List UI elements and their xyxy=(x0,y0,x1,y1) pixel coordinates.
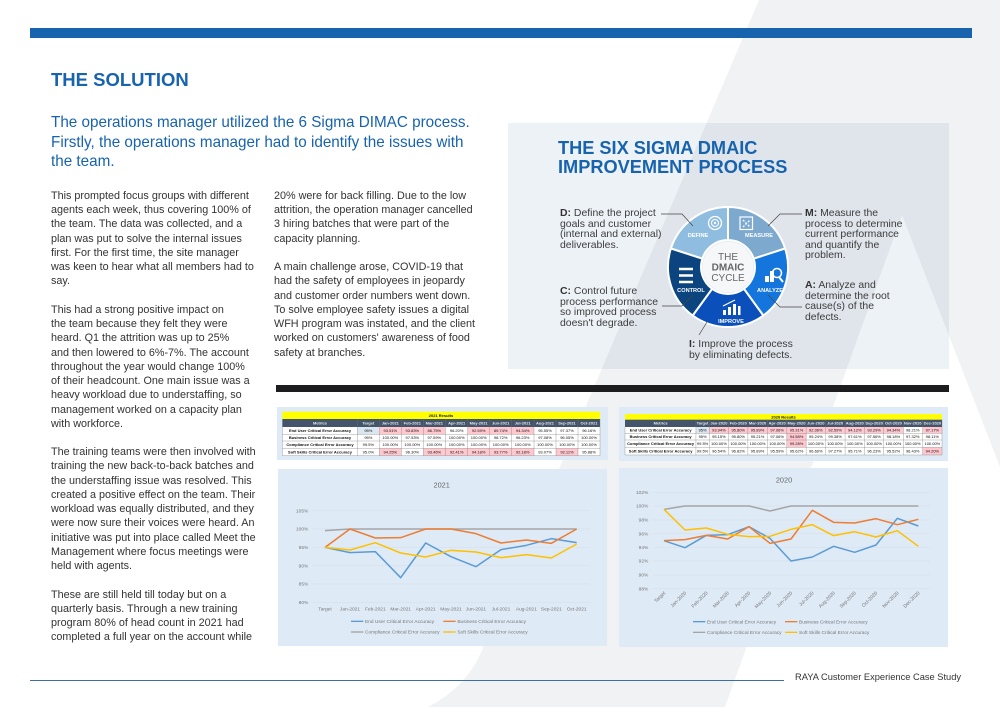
black divider bar xyxy=(276,385,949,392)
panel heading: THE SIX SIGMA DMAIC xyxy=(558,138,757,158)
line chart: 2021: Jul-2021 xyxy=(492,607,511,613)
callout: analyze: cause(s) of the xyxy=(805,301,874,312)
table: 2020 results: 100.00% xyxy=(808,441,824,446)
table: 2020 results: 100.00% xyxy=(730,441,747,446)
callout: control: doesn't degrade. xyxy=(560,318,637,329)
table: 2020 results: 100.00% xyxy=(847,441,863,446)
body text column 2: and customer order numbers went down. xyxy=(274,290,470,302)
table: 2020 results: 92.06% xyxy=(809,427,823,432)
body text column 2: 3 hiring batches that were part of the xyxy=(274,218,449,230)
callout: measure xyxy=(805,208,902,261)
table: 2020 results: 95.62% xyxy=(790,448,804,453)
table: 2021 results: Oct-2021 xyxy=(581,420,598,425)
table: 2021 results: Jan-2021 xyxy=(382,420,400,425)
table: 2020 results: Sep-2020 xyxy=(865,421,884,426)
callout: improve: I: Improve the process xyxy=(689,339,793,350)
center label: DMAIC xyxy=(712,262,744,274)
table: 2021 results: 93.83% xyxy=(406,428,420,433)
center label: CYCLE xyxy=(711,273,745,284)
line chart: 2020: 88% xyxy=(639,586,649,592)
line chart: 2021: Apr-2021 xyxy=(416,607,436,613)
body text column 2: attrition, the operation manager cancelled xyxy=(274,204,473,216)
line chart: 2020: May-2020 xyxy=(754,590,773,610)
line chart: 2021: Aug-2021 xyxy=(516,607,537,613)
table: 2020 results: 100.00% xyxy=(866,441,882,446)
line chart: 2020: 98% xyxy=(639,518,649,524)
table: 2020 results: Jul-2020 xyxy=(827,421,844,426)
table: 2020 results: Metrics xyxy=(654,421,668,426)
table: 2020 results: Feb-2020 xyxy=(730,421,748,426)
line chart: 2020: 102% xyxy=(636,490,649,496)
table: 2021 results: 89.74% xyxy=(494,428,508,433)
callout: improve xyxy=(689,339,793,361)
table: 2020 results: 95.59% xyxy=(770,448,784,453)
body text column 2: had the safety of employees in jeopardy xyxy=(274,275,465,287)
line chart: 2021: Jan-2021 xyxy=(340,607,360,613)
body text column 1: program 80% of head count in 2021 had xyxy=(51,617,244,629)
footer line xyxy=(30,680,784,681)
table: 2020 results: 95.89% xyxy=(751,427,765,432)
table: 2021 results: 100.00% xyxy=(471,442,487,447)
table: 2020 results: 97.27% xyxy=(828,448,842,453)
table: 2021 results: 93.51% xyxy=(384,428,398,433)
line chart: 2020 xyxy=(619,468,948,647)
callout: improve: by eliminating defects. xyxy=(689,350,792,361)
callout: measure: M: Measure the xyxy=(805,208,878,219)
body text column 1: These are still held till today but on a xyxy=(51,589,226,601)
table: 2020 results: 95% xyxy=(699,427,707,432)
table: 2020 results: 95.15% xyxy=(712,434,726,439)
line chart: 2020: 90% xyxy=(639,573,649,579)
table: 2020 results: 93.29% xyxy=(867,427,881,432)
callout: control: so improved process xyxy=(560,307,656,318)
table: 2020 results: 95.89% xyxy=(751,448,765,453)
body text column 1: initiative was put into place called Meet the xyxy=(51,532,256,544)
table: 2021 results: Jun-2021 xyxy=(492,420,510,425)
body text column 1: Management where focus meetings were xyxy=(51,546,248,558)
line chart: 2021: 90% xyxy=(299,563,309,569)
body text column 1: with workforce. xyxy=(51,418,123,430)
table: 2020 results: 94.34% xyxy=(887,427,901,432)
table: 2020 results: 95.31% xyxy=(790,427,804,432)
line chart: 2020: Mar-2020 xyxy=(712,590,731,609)
table: 2020 results: Jan-2020 xyxy=(710,421,728,426)
table: 2020 results: 98.18% xyxy=(887,434,901,439)
top bar xyxy=(30,28,972,38)
body text column 1: training the new back-to-back batches and xyxy=(51,460,254,472)
table: 2021 results: 97.08% xyxy=(538,435,552,440)
panel heading: IMPROVEMENT PROCESS xyxy=(558,157,787,177)
body text column 1: heard. Q1 the attrition was up to 25% xyxy=(51,332,229,344)
table: 2021 results: Feb-2021 xyxy=(404,420,422,425)
callout: analyze xyxy=(805,280,890,323)
line chart: 2020: Feb-2020 xyxy=(691,590,710,609)
table: 2020 results: Soft Skills Critical Error Accuracy xyxy=(629,448,693,453)
callout: control xyxy=(560,286,658,329)
table: 2021 results: Jul-2021 xyxy=(515,420,531,425)
line chart: 2021: Target xyxy=(318,607,332,613)
table: 2020 results: 93.94% xyxy=(712,427,726,432)
body text column 2: capacity planning. xyxy=(274,233,360,245)
body text column 1: plan was put to solve the internal issues xyxy=(51,233,242,245)
line chart: 2021: Jun-2021 xyxy=(466,607,486,613)
table: 2020 results: 99.5% xyxy=(697,448,709,453)
line chart: 2020: Nov-2020 xyxy=(881,590,901,610)
table: 2021 results: 2021 Results xyxy=(429,413,454,418)
body text column 1: were now sure their voices were heard. An xyxy=(51,517,254,529)
table: 2021 results: 99.5% xyxy=(363,442,374,447)
line chart: 2020: 92% xyxy=(639,559,649,565)
table: 2020 results: 97.61% xyxy=(848,434,862,439)
callout: analyze: defects. xyxy=(805,312,842,323)
table: 2020 results: 96.60% xyxy=(809,448,823,453)
callout: define: goals and customer xyxy=(560,219,651,230)
table: 2021 results: 100.00% xyxy=(449,442,465,447)
table: 2020 results: 94.12% xyxy=(848,427,862,432)
line chart: 2020: 100% xyxy=(636,504,649,510)
body text column 2: 20% were for back filling. Due to the low xyxy=(274,190,466,202)
table: 2020 results: Business Critical Error Accuracy xyxy=(630,434,692,439)
segment: define: DEFINE xyxy=(688,233,709,239)
center label: THE xyxy=(718,252,738,263)
table: 2021 results: 95% xyxy=(364,435,373,440)
table: 2021 results: 95.88% xyxy=(582,449,596,454)
table: 2020 results: 95.21% xyxy=(751,434,765,439)
callout: measure: current performance xyxy=(805,229,899,240)
table: 2020 results: Aug-2020 xyxy=(846,421,865,426)
table: 2020 results: Target xyxy=(697,421,709,426)
body text column 1: say. xyxy=(51,275,70,287)
table: 2021 results: 94.25% xyxy=(384,449,398,454)
callout: analyze: determine the root xyxy=(805,291,890,302)
line chart: 2021: Business Critical Error Accuracy xyxy=(457,619,527,625)
table: 2020 results: 97.32% xyxy=(906,434,920,439)
body text column 1: created a positive effect on the team. Their xyxy=(51,489,255,501)
callout: control: process performance xyxy=(560,297,658,308)
line chart: 2020: Compliance Critical Error Accuracy xyxy=(707,630,782,636)
body text column 1: The training teams were then involved with xyxy=(51,446,256,458)
table: 2021 results: 95.0% xyxy=(363,449,374,454)
table: 2021 results: 100.00% xyxy=(471,435,487,440)
body text column 1: of their headcount. One main issue was a xyxy=(51,375,250,387)
line chart: 2021: 2021 xyxy=(434,481,450,490)
body text column 1: completed a full year on the account while xyxy=(51,631,252,643)
table: 2020 results: May-2020 xyxy=(788,421,806,426)
intro text: the team. xyxy=(51,153,115,170)
callout: measure: problem. xyxy=(805,250,846,261)
table: 2021 results: 93.46% xyxy=(428,449,442,454)
leader lines xyxy=(661,214,802,336)
line chart: 2020: Soft Skills Critical Error Accuracy xyxy=(799,630,870,636)
line chart: 2020: Oct-2020 xyxy=(861,590,879,609)
body text column 1: and then lowered to 6%-7%. The account xyxy=(51,347,249,359)
line chart: 2021: 80% xyxy=(299,600,309,606)
table: 2021 results: 93.77% xyxy=(494,449,508,454)
body text column 1: workload was equally distributed, and they xyxy=(51,503,254,515)
body text column 1: quarterly basis. Through a new training xyxy=(51,603,237,615)
table: 2021 results: 94.18% xyxy=(472,449,486,454)
line chart: 2021: 95% xyxy=(299,545,309,551)
line chart: 2021: 105% xyxy=(296,508,309,514)
table: 2020 results: 96.82% xyxy=(731,448,745,453)
segment: improve: IMPROVE xyxy=(718,319,744,325)
body text column 1: first. For the first time, the site manager xyxy=(51,247,239,259)
table: 2020 results: Dec-2020 xyxy=(924,421,942,426)
table: 2020 results: Apr-2020 xyxy=(769,421,786,426)
table: 2021 results: 93.07% xyxy=(538,449,552,454)
table: 2021 results: Target xyxy=(362,420,375,425)
table: 2020 results: Oct-2020 xyxy=(885,421,903,426)
table: 2021 results: 100.00% xyxy=(581,435,597,440)
table: 2021 results: Soft Skills Critical Error Accuracy xyxy=(288,449,353,454)
line chart: 2020: End User Critical Error Accuracy xyxy=(707,619,777,625)
line chart: 2021: Compliance Critical Error Accuracy xyxy=(365,630,440,636)
table: 2020 results: 97.17% xyxy=(926,427,940,432)
body text column 2 xyxy=(274,190,475,359)
table: 2021 results: May-2021 xyxy=(470,420,488,425)
body text column 2: To solve employee safety issues a digital xyxy=(274,304,469,316)
body text column 1: the team. The data was collected, and a xyxy=(51,218,242,230)
intro text xyxy=(51,114,470,170)
callout: measure: process to determine xyxy=(805,219,902,230)
line chart: 2021: May-2021 xyxy=(440,607,462,613)
line chart: 2020: Jun-2020 xyxy=(776,590,794,609)
table: 2021 results: Apr-2021 xyxy=(448,420,466,425)
table: 2020 results: 95% xyxy=(699,434,707,439)
table: 2021 results: 97.59% xyxy=(428,435,442,440)
body text column 1 xyxy=(51,190,256,643)
table: 2021 results: 100.00% xyxy=(493,442,509,447)
body text column 1: This had a strong positive impact on xyxy=(51,304,224,316)
body text column 1: the team because they felt they were xyxy=(51,318,227,330)
line chart: 2021: Soft Skills Critical Error Accuracy xyxy=(457,630,528,636)
table: 2020 results: 95.52% xyxy=(887,448,901,453)
table: 2020 results: 96.43% xyxy=(906,448,920,453)
body text column 2: WFH program was instated, and the client xyxy=(274,318,475,330)
table: 2020 results: 95.24% xyxy=(809,434,823,439)
body text column 1: agents each week, thus covering 100% of xyxy=(51,204,251,216)
table: 2020 results: 100.00% xyxy=(905,441,921,446)
table: 2020 results: 97.56% xyxy=(867,434,881,439)
table: 2020 results: 100.00% xyxy=(924,441,941,446)
table: 2021 results: 100.00% xyxy=(382,442,399,447)
table: 2021 results: 92.18% xyxy=(516,449,530,454)
table: 2021 results: 100.00% xyxy=(581,442,597,447)
table: 2021 results: 98.72% xyxy=(494,435,508,440)
table: 2020 results: 100.00% xyxy=(886,441,902,446)
callout: define: deliverables. xyxy=(560,240,619,251)
table: 2020 results: 98.11% xyxy=(926,434,939,439)
table: 2020 results: 95.80% xyxy=(731,434,745,439)
table: 2021 results: 96.20% xyxy=(450,428,464,433)
table: 2020 results: 99.28% xyxy=(790,441,804,446)
table: 2020 results: 95.71% xyxy=(848,448,862,453)
callout: measure: and quantify the xyxy=(805,240,879,251)
table: 2020 results: End User Critical Error Accuracy xyxy=(630,427,692,432)
table: 2021 results: 95% xyxy=(364,428,373,433)
table: 2021 results: 92.41% xyxy=(450,449,464,454)
table: 2021 results: 100.00% xyxy=(559,442,575,447)
segment: analyze: ANALYZE xyxy=(757,288,783,294)
table: 2021 results: Sep-2021 xyxy=(558,420,577,425)
table: 2021 results: 100.00% xyxy=(449,435,465,440)
table: 2020 results: 98.21% xyxy=(906,427,920,432)
line chart: 2021: Oct-2021 xyxy=(567,607,587,613)
body text column 2: A main challenge arose, COVID-19 that xyxy=(274,261,463,273)
table: 2021 results: 96.23% xyxy=(516,435,530,440)
line chart: 2021: Mar-2021 xyxy=(390,607,411,613)
table: 2020 results xyxy=(619,407,948,461)
line chart: 2021: Sep-2021 xyxy=(541,607,562,613)
table: 2020 results: 96.23% xyxy=(867,448,881,453)
line chart: 2021: End User Critical Error Accuracy xyxy=(365,619,435,625)
table: 2021 results: 97.53% xyxy=(406,435,420,440)
line chart: 2020: Dec-2020 xyxy=(902,590,922,610)
table: 2021 results: Compliance Critical Error Accuracy xyxy=(286,442,354,447)
callout: analyze: A: Analyze and xyxy=(805,280,876,291)
callout: define: D: Define the project xyxy=(560,208,656,219)
table: 2021 results: Business Critical Error Accuracy xyxy=(289,435,352,440)
line chart: 2021: 100% xyxy=(296,527,309,533)
table: 2020 results: 100.00% xyxy=(750,441,766,446)
table: 2020 results: 92.59% xyxy=(828,427,842,432)
table: 2021 results: End User Critical Error Accuracy xyxy=(289,428,352,433)
line chart: 2020: 2020 xyxy=(776,475,792,484)
callout: define: (internal and external) xyxy=(560,229,662,240)
body text column 2: safety at branches. xyxy=(274,347,365,359)
table: 2020 results: 100.00% xyxy=(827,441,843,446)
table: 2021 results: 96.30% xyxy=(406,449,420,454)
panel: six sigma DMAIC process xyxy=(508,123,949,369)
table: 2021 results: 97.37% xyxy=(560,428,574,433)
table: 2021 results: 92.59% xyxy=(472,428,486,433)
table: 2021 results xyxy=(277,407,608,460)
body text column 1: throughout the year would change 100% xyxy=(51,361,245,373)
body text column 2: worked on customers' awareness of food xyxy=(274,332,470,344)
table: 2021 results: Aug-2021 xyxy=(536,420,555,425)
table: 2021 results: 96.05% xyxy=(560,435,574,440)
table: 2021 results: 100.00% xyxy=(426,442,443,447)
line chart: 2021 xyxy=(278,469,607,646)
segment: measure: MEASURE xyxy=(745,233,773,239)
table: 2020 results: 99.38% xyxy=(828,434,842,439)
table: 2020 results: 94.20% xyxy=(926,448,940,453)
body text column 1: This prompted focus groups with different xyxy=(51,190,249,202)
table: 2020 results: 2020 Results xyxy=(771,414,796,419)
intro text: The operations manager utilized the 6 Sigma DIMAC process. xyxy=(51,114,470,131)
table: 2021 results: Metrics xyxy=(313,420,328,425)
table: 2021 results: 96.16% xyxy=(582,428,596,433)
line chart: 2020: Jan-2020 xyxy=(670,590,688,609)
table: 2020 results: Nov-2020 xyxy=(904,421,922,426)
line chart: 2020: 96% xyxy=(639,531,649,537)
center label xyxy=(702,242,754,292)
line chart: 2020: Apr-2020 xyxy=(734,590,752,609)
DMAIC cycle wheel xyxy=(667,206,789,328)
line chart: 2020: 94% xyxy=(639,545,649,551)
body text column 1: was keen to hear what all members had to xyxy=(51,261,254,273)
line chart: 2021: Feb-2021 xyxy=(365,607,386,613)
body text column 1: the understaffing issue was resolved. This xyxy=(51,475,252,487)
line chart: 2020: Jul-2020 xyxy=(798,590,816,608)
table: 2020 results: 99.5% xyxy=(697,441,709,446)
table: 2021 results: 100.00% xyxy=(404,442,421,447)
table: 2021 results: 94.34% xyxy=(516,428,530,433)
line chart: 2020: Target xyxy=(653,590,668,604)
table: 2020 results: 100.00% xyxy=(769,441,785,446)
table: 2020 results: 97.06% xyxy=(770,427,784,432)
table: 2021 results: 86.75% xyxy=(428,428,442,433)
callout: define xyxy=(560,208,662,251)
callout: control: C: Control future xyxy=(560,286,637,297)
table: 2021 results: Mar-2021 xyxy=(426,420,444,425)
table: 2020 results: 100.00% xyxy=(711,441,727,446)
table: 2020 results: Mar-2020 xyxy=(749,421,767,426)
table: 2020 results: 94.58% xyxy=(790,434,804,439)
table: 2021 results: 100.00% xyxy=(537,442,553,447)
segment: control: CONTROL xyxy=(677,288,705,294)
line chart: 2020: Business Critical Error Accuracy xyxy=(799,619,868,625)
line chart: 2020: Aug-2020 xyxy=(818,590,837,610)
line chart: 2021: 85% xyxy=(299,582,309,588)
table: 2021 results: 95.55% xyxy=(538,428,552,433)
table: 2021 results: 92.11% xyxy=(560,449,574,454)
table: 2020 results: 97.06% xyxy=(770,434,784,439)
footer text: RAYA Customer Experience Case Study xyxy=(795,672,961,682)
intro text: Firstly, the operations manager had to identify the issues with xyxy=(51,134,464,151)
body text column 1: management worked on a capacity plan xyxy=(51,404,242,416)
table: 2020 results: 96.54% xyxy=(712,448,726,453)
line chart: 2020: Sep-2020 xyxy=(839,590,858,610)
table: 2021 results: 100.00% xyxy=(515,442,531,447)
body text column 1: heavy workload due to understaffing, so xyxy=(51,389,242,401)
table: 2021 results: 100.00% xyxy=(382,435,399,440)
panel heading xyxy=(558,138,787,177)
table: 2020 results: 95.80% xyxy=(731,427,745,432)
table: 2020 results: Compliance Critical Error Accuracy xyxy=(627,441,695,446)
body text column 1: held with agents. xyxy=(51,560,132,572)
title: THE SOLUTION xyxy=(51,68,189,90)
table: 2020 results: Jun-2020 xyxy=(807,421,825,426)
